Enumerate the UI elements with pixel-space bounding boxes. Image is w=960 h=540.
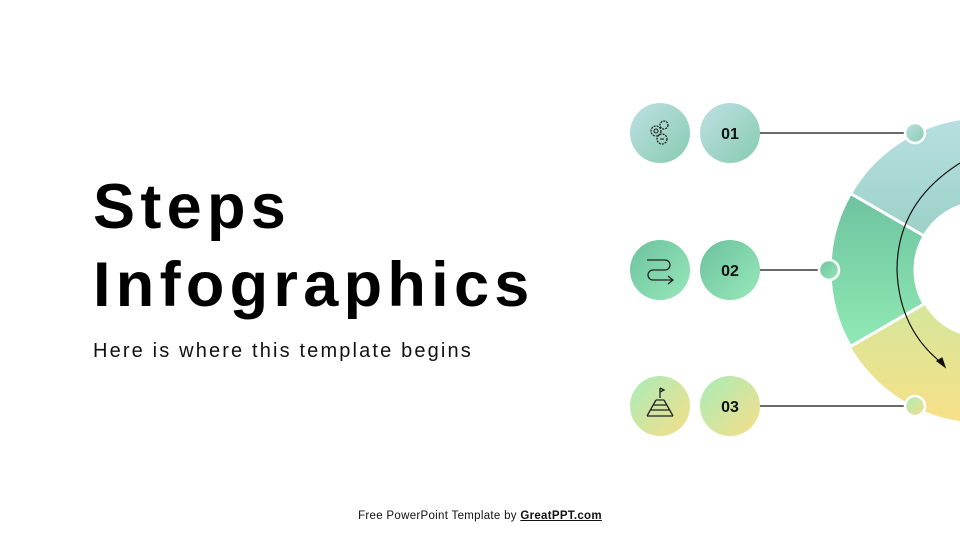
step 01: 01 [721, 126, 739, 143]
ring segment 2 [830, 194, 924, 346]
footer: Free PowerPoint Template by GreatPPT.com [358, 510, 602, 522]
subtitle: Here is where this template begins [93, 340, 473, 362]
ring segment 1 [850, 117, 960, 300]
step 02 [630, 240, 760, 300]
step 03 [630, 376, 760, 436]
step 01 [630, 103, 760, 163]
title: Infographics [93, 250, 535, 320]
connector lines [760, 133, 905, 406]
step 03: 03 [721, 399, 739, 416]
dots [819, 123, 925, 416]
arrow arc [897, 160, 960, 367]
step 02: 02 [721, 263, 739, 280]
title [93, 172, 535, 320]
ring segment 3 [850, 250, 960, 423]
title: Steps [93, 172, 291, 242]
